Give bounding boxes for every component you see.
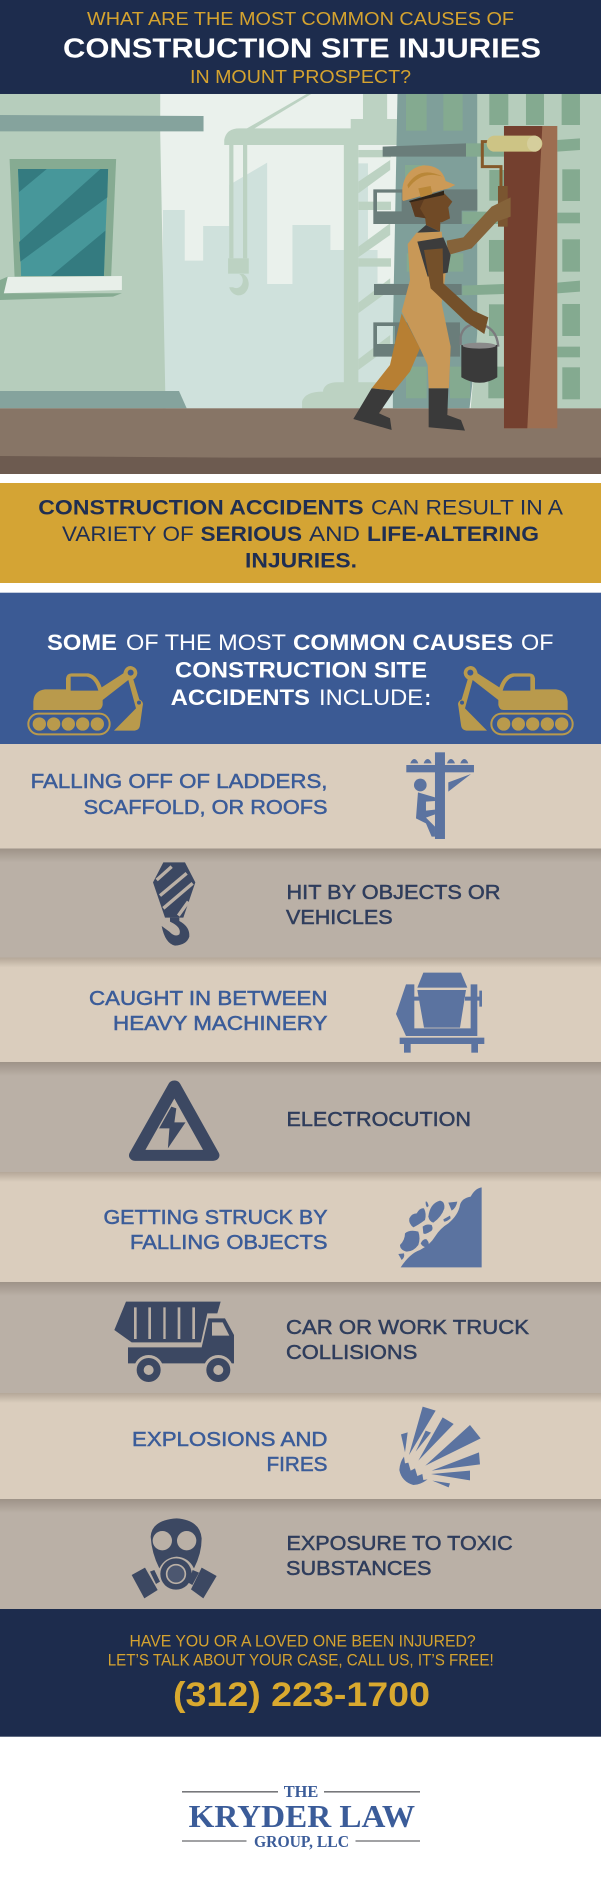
row: falling objects	[0, 1172, 601, 1282]
icon: cement mixer	[396, 973, 484, 1053]
phone number: (312) 223-1700	[173, 1676, 430, 1714]
row text line 1: EXPOSURE TO TOXIC	[286, 1533, 513, 1555]
row text line 2: VEHICLES	[286, 907, 393, 929]
icon: gas mask	[132, 1518, 217, 1598]
logo name: KRYDER LAW	[189, 1798, 415, 1834]
foreground building	[0, 94, 204, 408]
row: hit by objects	[0, 848, 601, 958]
footer call to action	[0, 1609, 601, 1737]
row text line 1: EXPLOSIONS AND	[132, 1429, 328, 1451]
right building	[471, 94, 601, 408]
callout line 3: INJURIES.	[245, 550, 357, 573]
row text line 1: HIT BY OBJECTS OR	[286, 882, 500, 904]
heading colon: :	[424, 685, 431, 710]
cta line 2: LET’S TALK ABOUT YOUR CASE, CALL US, IT’S FREE!	[108, 1652, 494, 1670]
header panel	[0, 0, 601, 94]
scaffold planks	[373, 143, 477, 357]
gold callout panel	[0, 483, 601, 583]
row text: ELECTROCUTION	[286, 1109, 471, 1131]
worker	[353, 165, 511, 431]
pillar being painted	[504, 126, 557, 428]
heading word: some: SOME	[47, 630, 117, 655]
ground	[0, 408, 601, 474]
callout line 1: CONSTRUCTION ACCIDENTS	[38, 497, 364, 520]
title line 2: CONSTRUCTION SITE INJURIES	[63, 32, 541, 63]
window	[0, 159, 122, 300]
row: truck collisions	[0, 1282, 601, 1393]
icon: excavator left	[28, 666, 143, 734]
callout word: serious: SERIOUS	[200, 523, 302, 546]
icon: crane hook	[153, 862, 195, 946]
background crane	[224, 94, 399, 408]
row text line 2: FIRES	[266, 1454, 328, 1476]
row text line 1: FALLING OFF OF LADDERS,	[31, 771, 327, 793]
illustration: construction site backdrop	[0, 94, 601, 474]
logo word: the: THE	[284, 1782, 318, 1801]
row text line 2: SCAFFOLD, OR ROOFS	[84, 797, 327, 819]
row: caught in machinery	[0, 958, 601, 1062]
row text line 1: CAR OR WORK TRUCK	[286, 1317, 530, 1339]
icon: explosion burst	[399, 1407, 481, 1487]
logo: The Kryder Law Group	[182, 1782, 420, 1851]
heading word: of: OF	[521, 630, 554, 655]
cta line 1: HAVE YOU OR A LOVED ONE BEEN INJURED?	[130, 1633, 476, 1651]
icon: dump truck	[114, 1302, 234, 1385]
row text line 2: HEAVY MACHINERY	[113, 1013, 328, 1035]
distant city skyline	[163, 163, 397, 408]
mid tower	[393, 94, 478, 408]
icon: excavator right	[458, 666, 573, 734]
heading word: include: INCLUDE	[319, 685, 423, 710]
logo subtitle: GROUP, LLC	[254, 1832, 349, 1851]
callout word: and: AND	[309, 523, 360, 546]
icon: worker climbing utility pole	[406, 752, 474, 839]
row text line 2: FALLING OBJECTS	[130, 1232, 328, 1254]
row text line 2: COLLISIONS	[286, 1342, 417, 1364]
building windows	[405, 94, 580, 399]
callout line 1 continuation: CAN RESULT IN A	[371, 497, 563, 520]
heading words: common causes: COMMON CAUSES	[293, 630, 513, 655]
callout line 2 start: VARIETY OF	[62, 523, 194, 546]
heading word: accidents: ACCIDENTS	[171, 685, 310, 710]
row: electrocution	[0, 1062, 601, 1172]
callout word: life-altering: LIFE-ALTERING	[367, 523, 539, 546]
icon: rock slide	[398, 1187, 482, 1267]
row: falling	[0, 744, 601, 848]
row: toxic substances	[0, 1499, 601, 1609]
paint roller	[482, 136, 542, 227]
title line 1: WHAT ARE THE MOST COMMON CAUSES OF	[87, 8, 514, 29]
blue panel: list heading	[0, 593, 601, 744]
row text line 1: GETTING STRUCK BY	[104, 1207, 328, 1229]
row: explosions	[0, 1393, 601, 1499]
row text line 2: SUBSTANCES	[286, 1558, 432, 1580]
paint bucket	[461, 324, 498, 383]
heading words: of the most: OF THE MOST	[126, 630, 286, 655]
icon: high voltage warning triangle	[135, 1086, 213, 1155]
heading line 2: CONSTRUCTION SITE	[175, 658, 427, 683]
illustration foreground: scaffolding, worker and pillar	[353, 94, 580, 431]
title line 3: IN MOUNT PROSPECT?	[190, 66, 411, 87]
row text line 1: CAUGHT IN BETWEEN	[89, 988, 328, 1010]
